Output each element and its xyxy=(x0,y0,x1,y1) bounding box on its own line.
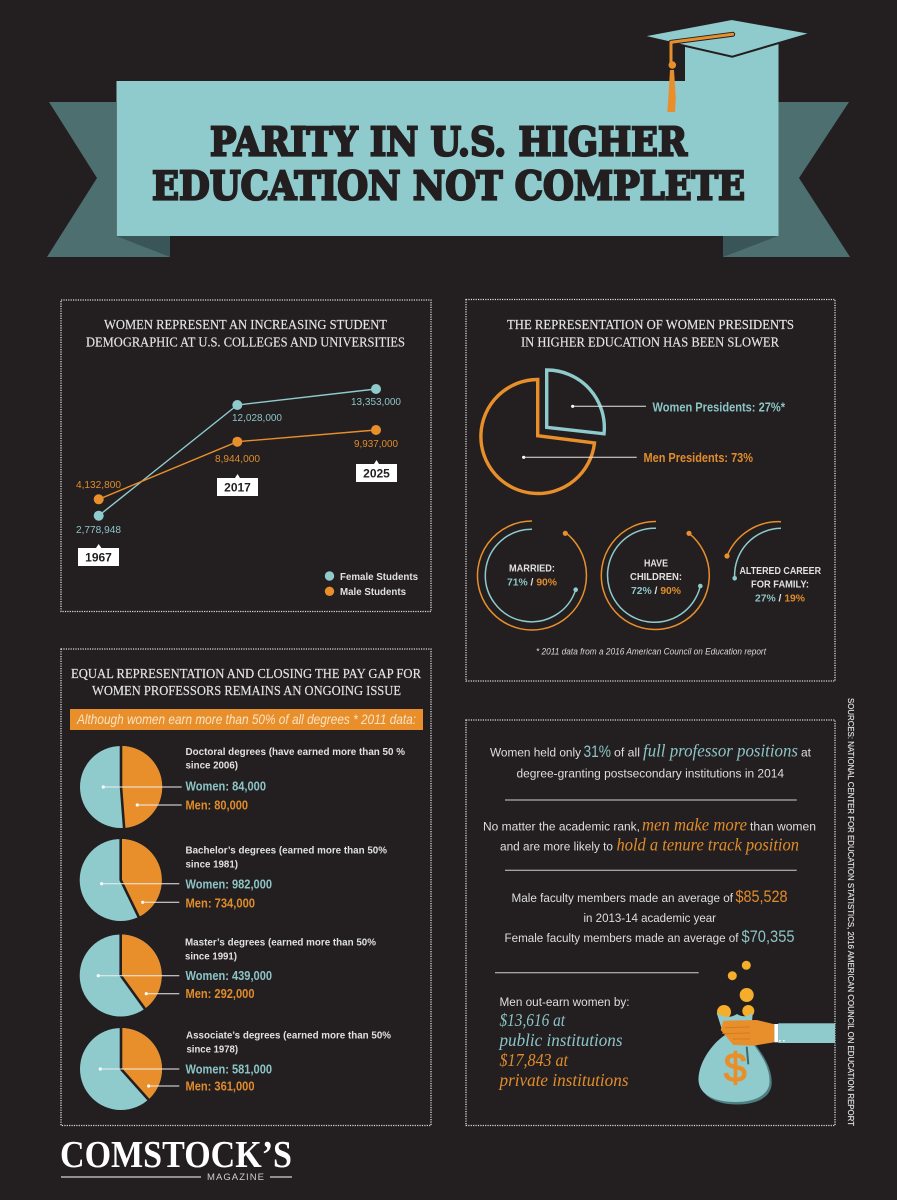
header banner xyxy=(47,19,850,257)
text: full professor positions: at xyxy=(801,746,812,760)
ring chart: married xyxy=(477,521,586,630)
year label 2017 xyxy=(217,474,258,496)
text: average salaries: in 2013-14 academic year xyxy=(584,911,716,925)
ring chart: altered career: FOR FAMILY: xyxy=(751,578,809,590)
text: full professor positions: 31% xyxy=(584,742,611,761)
text: bachelor's degrees: since 1981) xyxy=(186,858,238,870)
ring chart: married: 71% / 90% xyxy=(507,577,558,589)
logo: Comstock's Magazine: COMSTOCK’S xyxy=(60,1134,292,1176)
legend: Female Students xyxy=(340,571,418,583)
text: doctoral degrees: Doctoral degrees (have earned more than 50 % xyxy=(186,746,406,758)
icon: graduation cap xyxy=(642,19,812,112)
line chart: female students: 13,353,000 xyxy=(351,396,401,408)
text: associate's degrees: Men: 361,000 xyxy=(186,1080,255,1094)
text: men out-earn women: $17,843 at xyxy=(500,1050,569,1070)
ribbon: right tail xyxy=(723,102,850,257)
line chart: male students xyxy=(76,425,398,504)
text: average salaries: $70,355 xyxy=(742,927,794,946)
title: PARITY IN U.S. HIGHER xyxy=(210,120,688,166)
ring chart: have children: HAVE xyxy=(644,558,668,570)
icon: money bag and hand xyxy=(698,961,835,1104)
line chart: male students: 4,132,800 xyxy=(76,479,121,491)
legend xyxy=(325,571,418,598)
ring chart: have children: CHILDREN: xyxy=(630,571,682,583)
pie: men presidents xyxy=(481,380,753,493)
logo: Comstock's Magazine: MAGAZINE xyxy=(207,1172,264,1183)
text: men out-earn women: public institutions xyxy=(498,1030,623,1050)
heading: equal representation: WOMEN PROFESSORS REMAINS AN ONGOING ISSUE xyxy=(92,684,401,699)
text: doctoral degrees: Men: 80,000 xyxy=(186,798,248,812)
panel: student demographic line chart xyxy=(61,300,431,612)
text: associate's degrees xyxy=(186,1030,392,1094)
line chart: female students: 12,028,000 xyxy=(232,412,282,424)
pie: women presidents: Women Presidents: 27%* xyxy=(652,401,785,415)
ring chart: altered career: 27% / 19% xyxy=(755,593,806,605)
year label 1967 xyxy=(78,544,119,566)
heading: equal representation: EQUAL REPRESENTATION AND CLOSING THE PAY GAP FOR xyxy=(71,667,422,682)
callout bar: Although women earn more than 50% of all degrees * 2011 data: xyxy=(76,711,416,727)
callout bar xyxy=(70,709,423,730)
year label 2025: 2025 xyxy=(363,466,390,480)
line chart: male students: 9,937,000 xyxy=(354,438,398,450)
pie: bachelor's degrees xyxy=(80,838,179,921)
text: men out-earn women: Men out-earn women by: xyxy=(500,995,630,1009)
heading: women presidents xyxy=(507,318,794,350)
panel: women presidents xyxy=(466,300,835,681)
text: master's degrees: Women: 439,000 xyxy=(186,969,272,983)
text: men out-earn women: $13,616 at xyxy=(500,1010,566,1030)
heading: women presidents: IN HIGHER EDUCATION HAS BEEN SLOWER xyxy=(521,336,780,350)
sources note: SOURCES: NATIONAL CENTER FOR EDUCATION STATISTICS, 2016 AMERICAN COUNCIL ON EDUCATION REPORT xyxy=(846,698,855,1126)
text: average salaries: $85,528 xyxy=(736,887,788,906)
text: full professor positions xyxy=(490,740,812,780)
year label 1967: 1967 xyxy=(85,550,112,564)
text: men out-earn women xyxy=(498,995,630,1090)
heading: student demographic: WOMEN REPRESENT AN INCREASING STUDENT xyxy=(104,318,387,333)
text: average salaries: Female faculty members made an average of xyxy=(504,931,739,945)
text: bachelor's degrees: Men: 734,000 xyxy=(186,896,255,910)
text: men make more: hold a tenure track position xyxy=(616,835,799,855)
text: master's degrees: Men: 292,000 xyxy=(186,987,255,1001)
legend: Male Students xyxy=(340,586,406,598)
text: men make more: and are more likely to xyxy=(500,840,613,854)
text: bachelor's degrees xyxy=(186,844,388,910)
text: master's degrees: since 1991) xyxy=(185,950,237,962)
text: associate's degrees: Women: 581,000 xyxy=(186,1062,272,1076)
panel: degrees earned xyxy=(61,649,431,1126)
ring chart: married: MARRIED: xyxy=(509,563,555,575)
year label 2017: 2017 xyxy=(224,480,251,494)
text: men make more: No matter the academic rank, xyxy=(483,820,640,834)
text: men make more: than women xyxy=(750,820,816,834)
line chart: female students xyxy=(76,384,401,536)
text: average salaries xyxy=(504,887,794,946)
line chart: male students: 8,944,000 xyxy=(215,453,260,465)
text: associate's degrees: Associate’s degrees (earned more than 50% xyxy=(186,1030,392,1042)
panel: pay gap facts xyxy=(466,720,835,1126)
text: doctoral degrees: Women: 84,000 xyxy=(186,779,266,793)
heading: equal representation xyxy=(71,667,422,699)
text: men out-earn women: private institutions xyxy=(498,1070,629,1090)
heading: women presidents: THE REPRESENTATION OF WOMEN PRESIDENTS xyxy=(507,318,794,333)
text: associate's degrees: since 1978) xyxy=(186,1043,238,1055)
text: master's degrees xyxy=(185,936,377,1001)
line chart: female students: 2,778,948 xyxy=(76,524,121,536)
text: doctoral degrees xyxy=(186,746,406,812)
text: bachelor's degrees: Women: 982,000 xyxy=(186,877,272,891)
text: full professor positions: full professor positions xyxy=(643,740,798,760)
pie: doctoral degrees xyxy=(80,745,182,829)
pie: master's degrees xyxy=(80,934,179,1016)
year label 2025 xyxy=(356,460,397,482)
text: full professor positions: Women held only xyxy=(490,746,582,760)
banner panel xyxy=(116,44,778,236)
text: full professor positions: degree-granting postsecondary institutions in 2014 xyxy=(516,766,784,780)
footnote: * 2011 data from a 2016 American Council on Education report xyxy=(536,646,766,656)
text: master's degrees: Master’s degrees (earned more than 50% xyxy=(185,936,377,948)
icon: money bag and hand: $ xyxy=(724,1044,747,1090)
text: men make more xyxy=(483,815,816,855)
text: doctoral degrees: since 2006) xyxy=(186,760,238,772)
ring chart: altered career xyxy=(724,522,821,605)
title: EDUCATION NOT COMPLETE xyxy=(152,164,745,210)
pie: men presidents: Men Presidents: 73% xyxy=(644,451,753,465)
pie: associate's degrees xyxy=(80,1027,179,1110)
text: men make more: men make more xyxy=(642,815,747,835)
heading: student demographic xyxy=(86,318,405,350)
text: average salaries: Male faculty members made an average of xyxy=(512,891,734,905)
ribbon: left tail xyxy=(47,102,170,257)
text: full professor positions: of all xyxy=(614,746,640,760)
title xyxy=(152,120,745,210)
heading: student demographic: DEMOGRAPHIC AT U.S. COLLEGES AND UNIVERSITIES xyxy=(86,336,405,350)
ring chart: have children: 72% / 90% xyxy=(631,585,682,597)
text: bachelor's degrees: Bachelor’s degrees (earned more than 50% xyxy=(186,844,388,856)
ring chart: altered career: ALTERED CAREER xyxy=(740,565,821,577)
ring chart: have children xyxy=(601,521,709,629)
pie: women presidents xyxy=(547,370,785,434)
